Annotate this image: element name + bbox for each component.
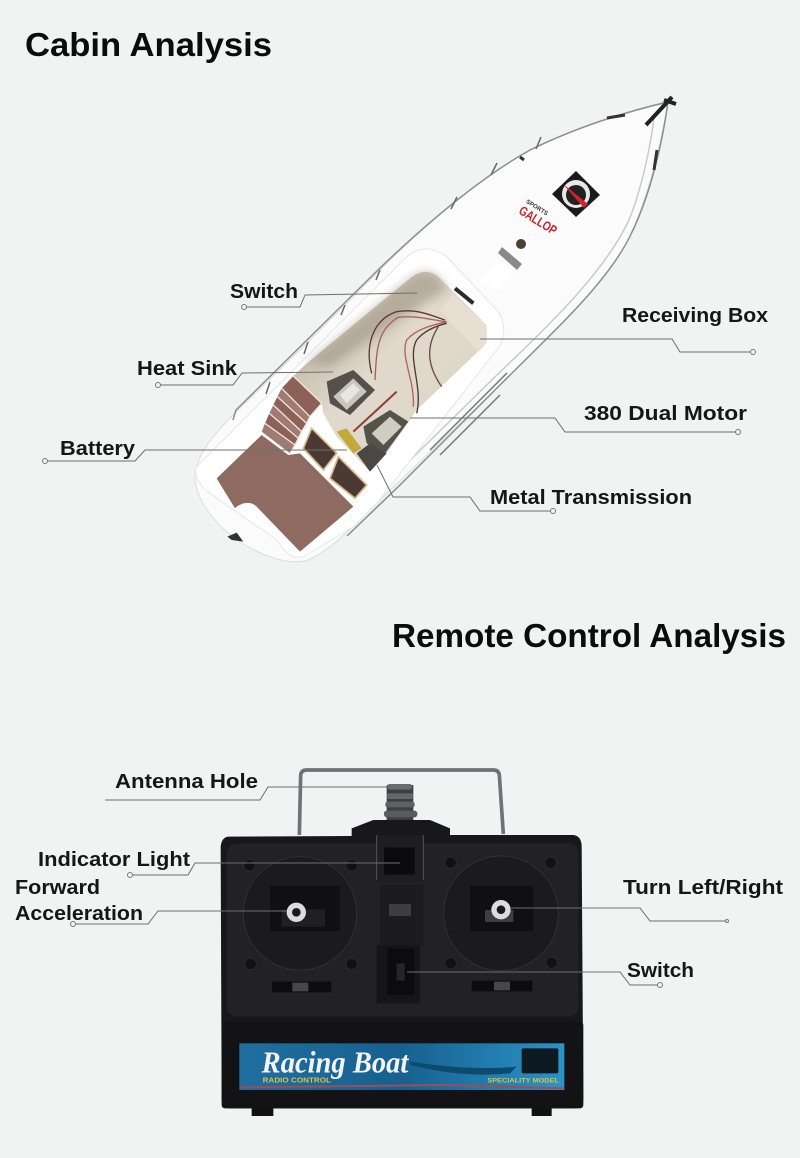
callout: Receiving Box: Receiving Box (622, 305, 768, 327)
callout: Battery: Battery (60, 438, 136, 460)
label title: Racing Boat (261, 1046, 410, 1080)
title: Remote Control Analysis: Remote Control Analysis (392, 617, 786, 654)
boat illustration (195, 97, 676, 562)
right control stick well (444, 856, 558, 971)
callout: Forward Acceleration: Acceleration (15, 903, 143, 925)
callout: Forward Acceleration: Forward (15, 877, 100, 899)
callout: Indicator Light (38, 849, 400, 878)
cabin floor (217, 435, 353, 552)
panel: Racing Boat label (239, 1043, 564, 1090)
brand logo: Gallop (516, 199, 563, 238)
callout: Antenna Hole: Antenna Hole (115, 771, 258, 793)
cabin detail, in zoom coordinates (195, 249, 504, 557)
wiring (353, 311, 447, 432)
interior shadow (307, 272, 448, 367)
antenna base (384, 784, 417, 820)
label subtitle left: RADIO CONTROL (263, 1077, 332, 1084)
label subtitle right: SPECIALITY MODEL (487, 1077, 559, 1084)
yellow gearbox (337, 428, 362, 453)
stern fitting (227, 533, 243, 542)
screws (244, 857, 557, 970)
logo badge (552, 171, 600, 217)
callout: Turn Left/Right: Turn Left/Right (623, 877, 783, 899)
transmission dark housing (357, 443, 387, 472)
title: Cabin Analysis: Cabin Analysis (25, 26, 272, 63)
deck switch knob and plate (480, 239, 526, 290)
cabin interior (293, 272, 487, 472)
cabin surround (195, 249, 504, 557)
hull side rails (233, 102, 668, 536)
centre column (377, 835, 423, 1003)
callout: Forward Acceleration (15, 877, 287, 926)
brand logo: Gallop: GALLOP (516, 203, 560, 238)
callout: Heat Sink: Heat Sink (137, 358, 238, 380)
callout: Metal Transmission: Metal Transmission (490, 487, 692, 509)
callout: Switch (230, 281, 417, 310)
motor one (327, 370, 375, 415)
callout: Antenna Hole (105, 771, 387, 800)
indicator light window (384, 847, 415, 875)
stair steps (262, 376, 322, 453)
lower cabin windows (303, 428, 367, 498)
callout: Switch: Switch (230, 281, 298, 303)
left control stick well (243, 857, 357, 970)
trim sliders (272, 981, 532, 992)
switch on the cabin wall (455, 288, 473, 303)
boat hull (195, 101, 668, 562)
callout: Switch: Switch (627, 960, 694, 982)
callout: Heat Sink (137, 358, 333, 388)
bow fitting (646, 97, 676, 125)
remote control illustration, in zoom coordinates (221, 770, 583, 1116)
callout: Turn Left/Right (510, 877, 783, 922)
callout: Battery (42, 438, 347, 464)
callout: Metal Transmission (377, 465, 692, 514)
rail clips (520, 115, 657, 170)
motor two (363, 410, 408, 453)
callout: Switch (407, 960, 694, 988)
brand logo: Gallop: SPORTS (525, 199, 549, 217)
carry handle (299, 770, 503, 835)
callout: 380 Dual Motor (410, 403, 747, 434)
callout: 380 Dual Motor: 380 Dual Motor (584, 403, 747, 425)
label window (522, 1048, 558, 1073)
lower band (222, 1022, 583, 1108)
remote body (221, 820, 583, 1108)
channel switch (377, 945, 420, 1003)
feet (252, 1107, 552, 1116)
face plate (227, 843, 578, 1017)
receiver box (440, 295, 487, 350)
callout: Receiving Box (480, 305, 768, 354)
callout: Indicator Light: Indicator Light (38, 849, 190, 871)
